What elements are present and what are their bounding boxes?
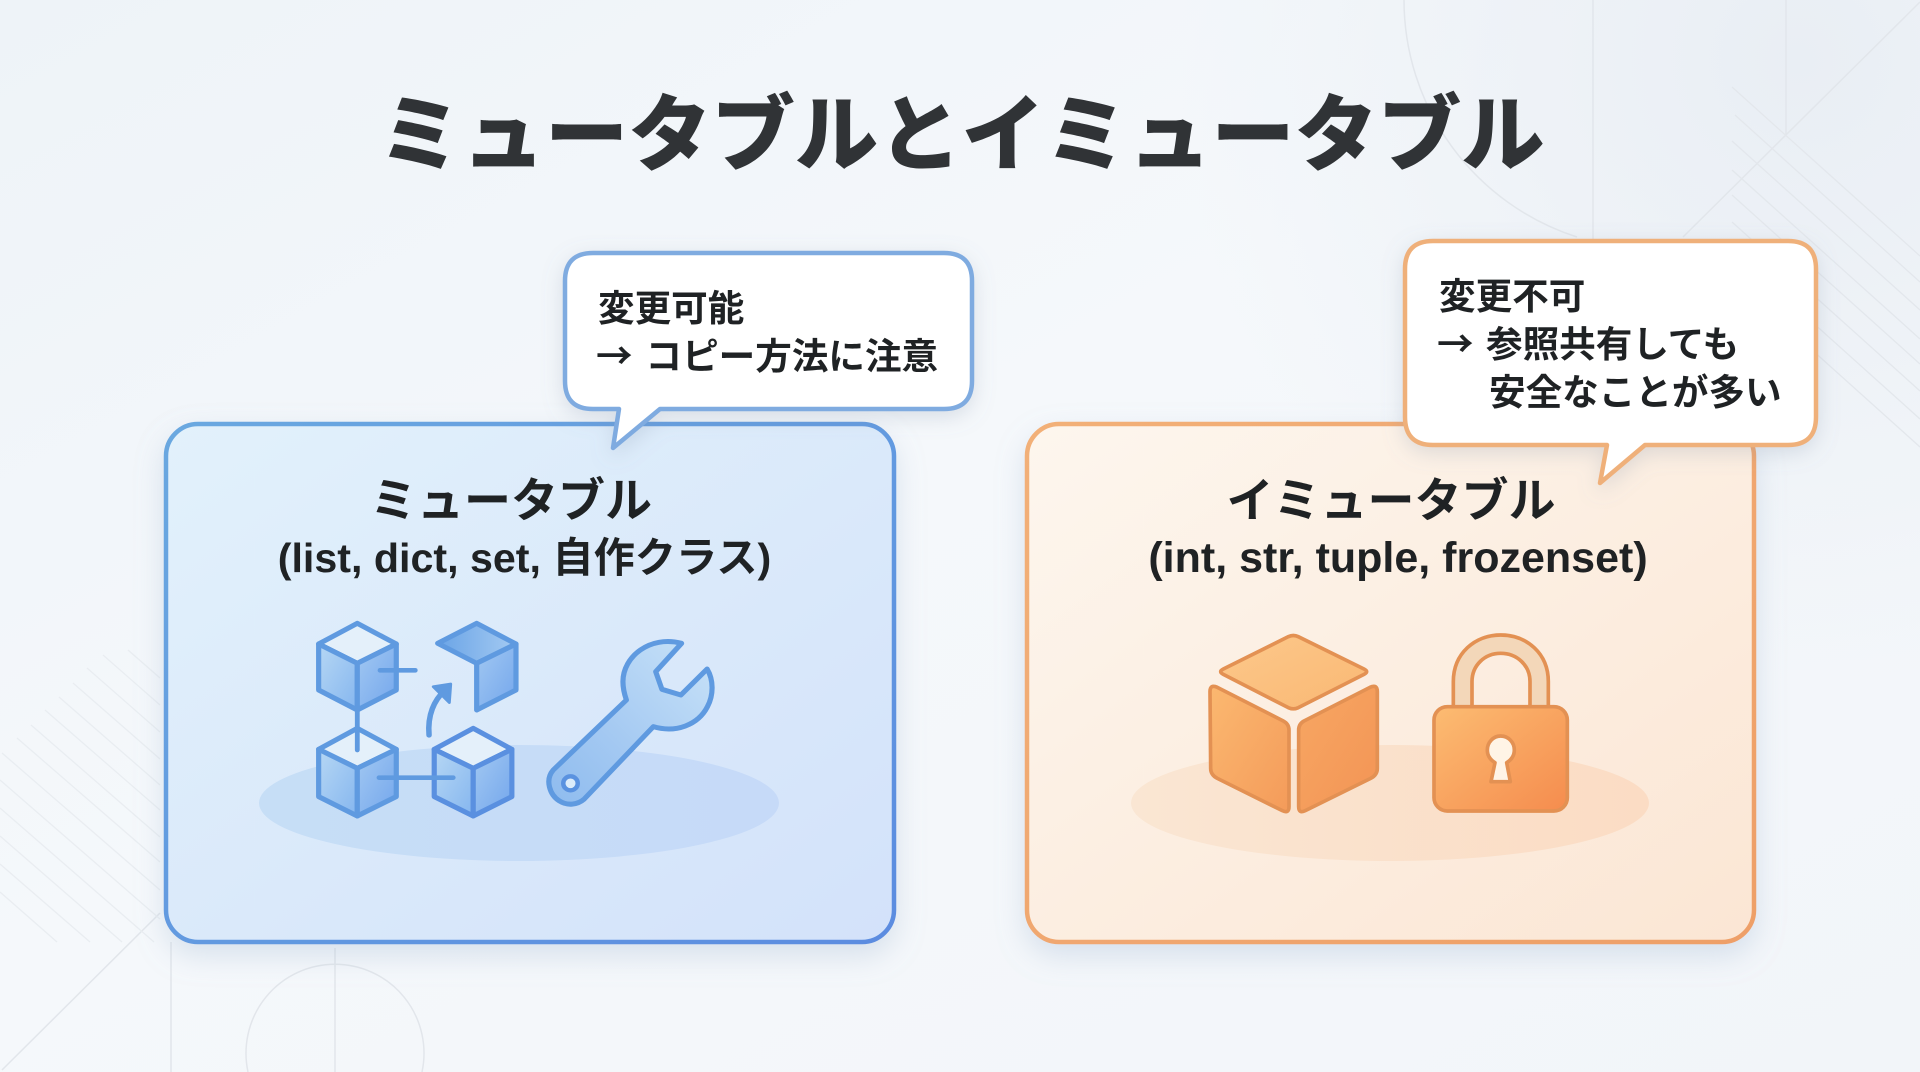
callout text: 安全なことが多い <box>1489 372 1782 413</box>
subheading: mutable types: (list, dict, set, 自作クラス) <box>278 535 771 581</box>
callout text <box>596 288 938 380</box>
callout text: 変更不可 <box>1439 276 1585 317</box>
callout text: → <box>1437 315 1474 368</box>
heading: immutable: イミュータブル <box>1226 474 1556 527</box>
panel: immutable <box>1027 424 1754 942</box>
callout text: 参照共有しても <box>1486 324 1739 365</box>
subheading: immutable types: (int, str, tuple, frozenset) <box>1148 534 1648 582</box>
icon: platform ellipse <box>1131 745 1649 861</box>
heading: mutable: ミュータブル <box>370 474 652 527</box>
icon: platform ellipse <box>259 745 779 861</box>
callout text <box>1437 276 1782 413</box>
callout: changeable <box>565 253 972 448</box>
icon: cubes and arrow <box>319 623 516 816</box>
icon: cube <box>1210 635 1377 812</box>
callout text: 変更可能 <box>598 288 744 329</box>
panel: mutable <box>166 424 894 942</box>
callout: not changeable <box>1405 241 1816 483</box>
icon: wrench <box>549 642 712 804</box>
callout text: コピー方法に注意 <box>646 336 938 377</box>
title: ミュータブルとイミュータブル <box>378 89 1545 182</box>
callout text: → <box>596 327 633 380</box>
icon: padlock <box>1434 635 1567 811</box>
